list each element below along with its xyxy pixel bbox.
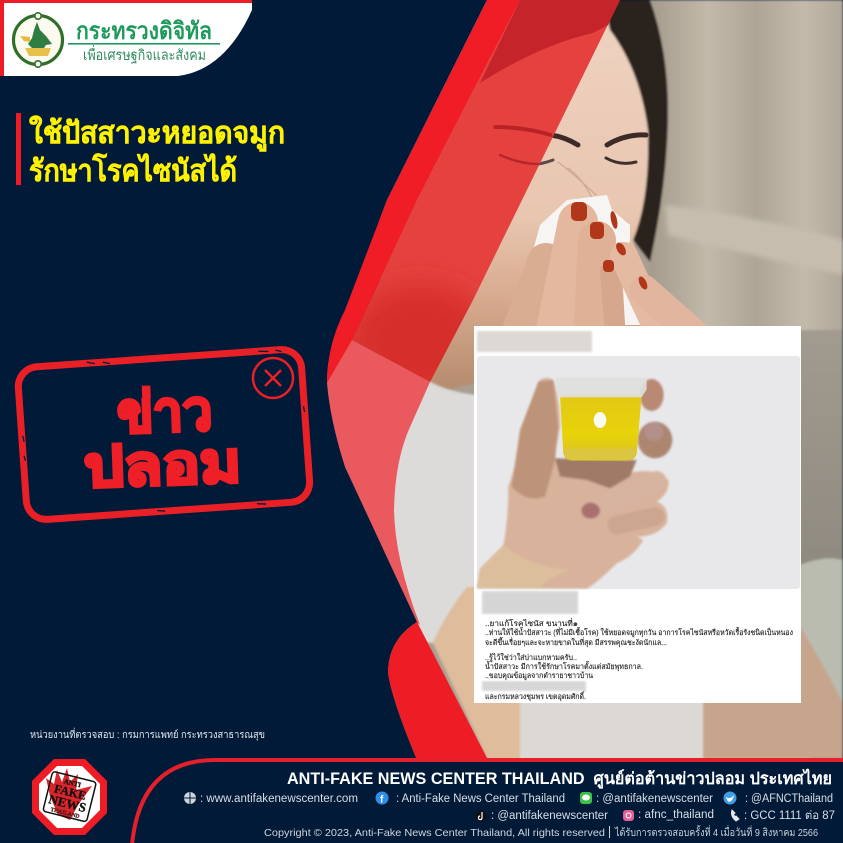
navy panel [0,0,487,760]
anti-fake news logo: NEWS [47,791,88,815]
stamp text: ข่าว [116,378,213,445]
anti-fake news logo: FAKE [53,781,88,803]
copyright line: Copyright © 2023, Anti-Fake News Center Thailand, All rights reserved [264,827,605,839]
post text: ..ท่านให้ใช้น้ำปัสสาวะ (ที่ไม่มีเชื้อโรค) ใช้หยอดจมูกทุกวัน อาการโรคไซนัสหรือหวัดเรื้อรังชนิดเป็นหนอง [485,627,793,637]
post text: ..ยาแก้โรคไซนัส ขนานที่๑ [485,618,578,628]
post text: จะดีขึ้นเรื่อยๆและจะหายขาดในที่สุด มีสรรพคุณชะงัดนักแล... [485,637,667,647]
title: ใช้ปัสสาวะหยอดจมูก [29,115,285,152]
red-tinted brow and eye [495,127,551,164]
footer contact row 1: : Anti-Fake News Center Thailand [396,793,565,805]
post text: และกรมหลวงชุมพร เขตอุดมศักดิ์. [485,690,586,701]
stamp text: ปลอม [83,430,242,499]
icon: facebook: f [380,794,384,806]
blurred line [482,681,586,691]
stamp cross circle [253,358,293,398]
title: รักษาโรคไซนัสได้ [29,152,237,188]
ministry tagline: เพื่อเศรษฐกิจและสังคม [83,45,206,64]
fake news stamp [17,347,311,521]
title [29,115,285,188]
icon: facebook [376,792,388,806]
footer contact row 1 [184,792,833,806]
red shape lower [388,622,488,760]
stamp text [81,377,242,499]
photo: woman sneezing into tissue [340,0,843,760]
icon: instagram [623,810,634,821]
footer contact row 1: : www.antifakenewscenter.com [200,793,358,805]
anti-fake news logo: THAILAND [50,807,80,820]
footer contact row 2: : @antifakenewscenter [491,810,608,822]
icon: web [184,792,196,804]
icon: tiktok [476,810,486,822]
post text: น้ำปัสสาวะ มีการใช้รักษาโรคมาตั้งแต่สมัยพุทธกาล. [485,661,643,671]
anti-fake news logo: ANTI [63,777,82,789]
social post card [474,326,801,703]
footer contact row 1: : @antifakenewscenter [596,793,713,805]
anti-fake news logo [32,759,107,835]
footer band [0,760,843,843]
post photo: hand holding urine cup [477,356,800,589]
post text: ..ขอบคุณข้อมูลจากตำรายาชาวบ้าน [485,671,593,680]
post text: ..รู้ไว้ใช่ว่าใส่บ่าแบกหามครับ.. [485,653,577,662]
footer heading: ANTI-FAKE NEWS CENTER THAILAND ศูนย์ต่อต้านข่าวปลอม ประเทศไทย [287,768,832,790]
icon: line [580,792,592,804]
copyright line [264,825,818,839]
red band upper [327,0,520,383]
emblem: Ministry seal [14,13,62,67]
footer contact row 2: : GCC 1111 ต่อ 87 [744,810,835,822]
translucent red ribbon: over shirt [320,340,430,625]
logo panel [0,0,252,76]
nails [571,202,649,291]
tissue [530,195,662,325]
brows, eyes [538,135,646,198]
translucent red ribbon: over face [350,0,620,395]
title bar [16,113,21,185]
footer contact row 2: : afnc_thailand [638,809,714,821]
agency credit: หน่วยงานที่ตรวจสอบ : กรมการแพทย์ กระทรวงสาธารณสุข [30,727,265,741]
ministry name: กระทรวงดิจิทัล [76,18,212,45]
icon: twitter [724,792,736,804]
footer contact row 2 [476,809,835,822]
blurred name [482,591,578,614]
fingers [516,222,695,345]
footer contact row 1: : @AFNCThailand [745,793,833,805]
icon: phone [732,810,739,821]
post text [485,618,793,701]
blurred account name [477,331,592,352]
